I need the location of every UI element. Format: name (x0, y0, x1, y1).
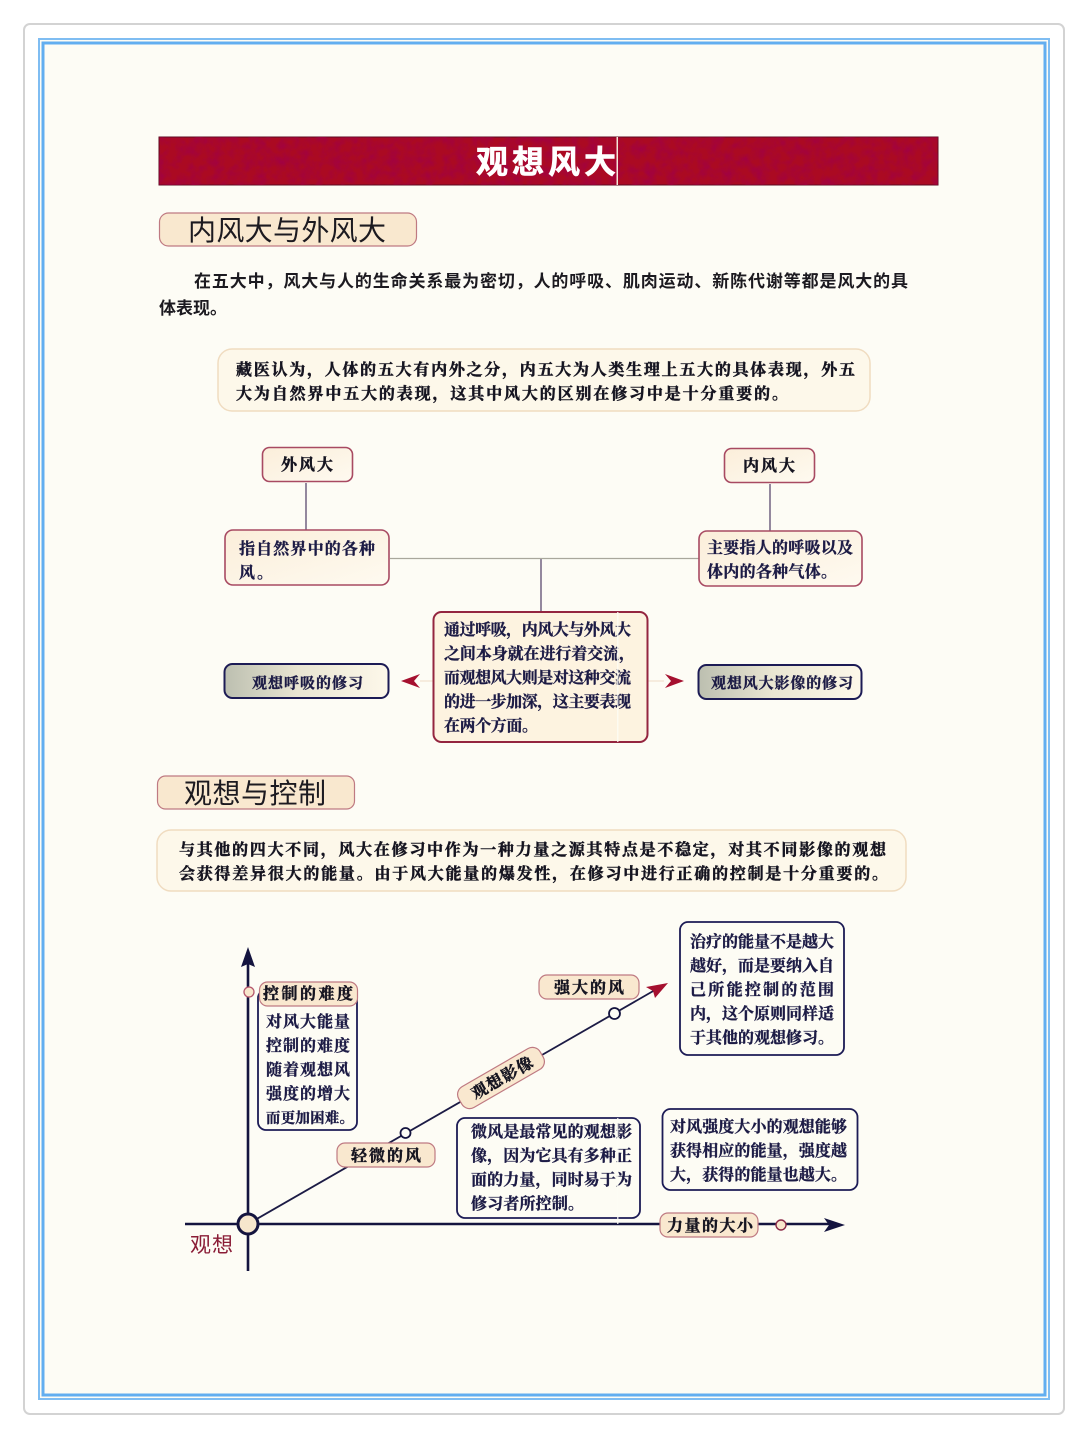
callout: 藏医认为: 大为自然界中五大的表现，这其中风大的区别在修习中是十分重要的。 (236, 384, 788, 404)
box: centre explanation: 在两个方面。 (444, 716, 538, 735)
y axis (241, 947, 255, 1271)
box: 控制的难度 description: 对风大能量 (266, 1012, 350, 1031)
callout: 藏医认为 (218, 349, 870, 411)
box: centre explanation: 通过呼吸，内风大与外风大 (444, 620, 631, 640)
box: 控制的难度 description: 随着观想风 (266, 1060, 350, 1079)
box: 外风大 description (225, 530, 389, 585)
intro paragraph: 体表现。 (159, 299, 227, 318)
box: 内风大 description: 体内的各种气体。 (707, 562, 837, 581)
box: 对风强度: 获得相应的能量，强度越 (670, 1141, 847, 1161)
box: centre explanation: 而观想风大则是对这种交流 (444, 668, 632, 687)
heading: 观想与控制 (158, 776, 354, 809)
intro paragraph: 在五大中，风大与人的生命关系最为密切，人的呼吸、肌肉运动、新陈代谢等都是风大的具 (194, 271, 908, 291)
label: 观想: 观想 (190, 1234, 233, 1257)
callout: 风大的控制 (157, 830, 906, 891)
box: 控制的难度 description: 强度的增大 (266, 1084, 350, 1103)
box: 微风 (457, 1118, 640, 1224)
box: 观想风大影像的修习 (698, 665, 862, 699)
marker: top of y axis (244, 987, 254, 997)
heading: 观想与控制: 观想与控制 (184, 778, 326, 809)
tag: 控制的难度 (260, 982, 358, 1006)
x axis (185, 1218, 845, 1232)
box: 治疗的能量: 治疗的能量不是越大 (690, 932, 834, 951)
origin marker (238, 1214, 258, 1234)
box: 控制的难度 description (258, 990, 357, 1130)
intro paragraph (159, 271, 908, 318)
box: 对风强度: 大，获得的能量也越大。 (670, 1165, 847, 1185)
box: 治疗的能量: 己所能控制的范围 (690, 980, 834, 999)
box: 外风大 description: 指自然界中的各种 (239, 539, 375, 558)
marker: 强大 (609, 1008, 620, 1019)
box: 治疗的能量: 于其他的观想修习。 (690, 1028, 834, 1047)
chart: 观想 axes and diagonal (185, 947, 845, 1271)
box: 观想风大影像的修习: 观想风大影像的修习 (711, 674, 853, 692)
box: 外风大 description: 风。 (239, 564, 273, 582)
arrow: right (665, 674, 684, 688)
box: 观想呼吸的修习: 观想呼吸的修习 (252, 674, 363, 692)
box: 控制的难度 description: 控制的难度 (266, 1036, 350, 1055)
box: 微风: 面的力量，同时易于为 (471, 1171, 632, 1190)
box: 内风大: 内风大 (743, 456, 795, 475)
box: 治疗的能量 (680, 922, 844, 1055)
marker: 轻微 (400, 1128, 410, 1138)
box: 外风大: 外风大 (281, 456, 333, 474)
arrow: left (401, 674, 420, 688)
tag: 力量的大小: 力量的大小 (667, 1217, 755, 1235)
box: 治疗的能量: 内，这个原则同样适 (690, 1004, 834, 1024)
box: 内风大 description: 主要指人的呼吸以及 (707, 538, 853, 557)
box: 微风: 像，因为它具有多种正 (471, 1146, 632, 1166)
tag: 强大的风 (539, 975, 639, 999)
box: centre explanation: 的进一步加深，这主要表现 (444, 692, 631, 712)
tag: 观想影像: 观想影像 (468, 1053, 536, 1103)
heading: 内风大与外风大: 内风大与外风大 (188, 215, 386, 246)
box: 控制的难度 description: 而更加困难。 (266, 1109, 354, 1127)
box: 观想呼吸的修习 (224, 664, 388, 698)
box: centre explanation (434, 612, 648, 742)
tag: 轻微的风: 轻微的风 (351, 1147, 421, 1165)
box: centre explanation: 之间本身就在进行着交流， (444, 644, 635, 664)
diagonal line (248, 983, 668, 1224)
tag: 轻微的风 (337, 1143, 435, 1167)
tag: 强大的风: 强大的风 (554, 979, 624, 997)
callout: 藏医认为: 藏医认为，人体的五大有内外之分，内五大为人类生理上五大的具体表现，外五 (236, 360, 855, 380)
marker: x axis end (776, 1220, 786, 1230)
box: 内风大 (724, 448, 814, 482)
box: 外风大 (262, 448, 352, 482)
box: 微风: 微风是最常见的观想影 (471, 1122, 632, 1141)
tag: 控制的难度: 控制的难度 (263, 984, 353, 1003)
tag: 力量的大小 (660, 1213, 758, 1237)
title banner: 观想风大 (476, 144, 616, 180)
title banner (159, 137, 938, 185)
box: 对风强度 (662, 1109, 858, 1190)
connector lines (306, 483, 770, 681)
box: 微风: 修习者所控制。 (471, 1194, 584, 1213)
callout: 风大的控制: 会获得差异很大的能量。由于风大能量的爆发性，在修习中进行正确的控制是十分重要的。 (179, 864, 888, 884)
box: 对风强度: 对风强度大小的观想能够 (670, 1117, 847, 1136)
box: 内风大 description (699, 531, 862, 586)
box: 治疗的能量: 越好，而是要纳入自 (690, 956, 834, 976)
callout: 风大的控制: 与其他的四大不同，风大在修习中作为一种力量之源其特点是不稳定，对其不同影像的观想 (179, 840, 887, 860)
tag: 观想影像 (454, 1044, 548, 1112)
